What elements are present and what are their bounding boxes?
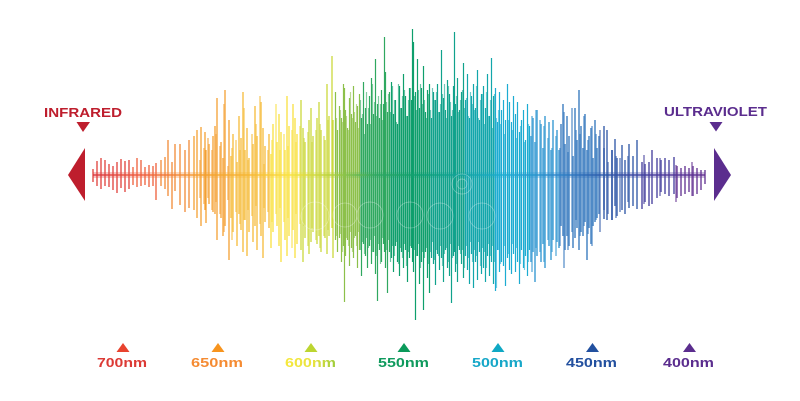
legend: 400nm	[663, 343, 714, 370]
legend: 650nm: 650nm	[191, 355, 243, 370]
legend: 650nm	[191, 343, 243, 370]
legend: 700nm: 700nm	[97, 355, 147, 370]
legend: 400nm: 400nm	[663, 355, 714, 370]
infrared label: INFRARED	[44, 105, 122, 120]
icon: ultraviolet marker triangle	[710, 122, 722, 132]
spectrum waveform chart	[93, 29, 705, 320]
legend: 700nm	[97, 343, 147, 370]
legend: 500nm	[472, 343, 523, 370]
legend: 550nm	[378, 343, 429, 370]
legend: 550nm: 550nm	[378, 355, 429, 370]
icon: infrared marker triangle	[76, 122, 90, 132]
legend: 450nm	[566, 343, 617, 370]
legend: 500nm: 500nm	[472, 355, 523, 370]
arrow: left infrared	[68, 148, 85, 201]
legend: 600nm	[285, 343, 336, 370]
arrow: right ultraviolet	[714, 148, 731, 201]
legend: 450nm: 450nm	[566, 355, 617, 370]
legend: 600nm: 600nm	[285, 355, 336, 370]
watermark rings	[301, 174, 495, 230]
ultraviolet label: ULTRAVIOLET	[664, 104, 767, 119]
